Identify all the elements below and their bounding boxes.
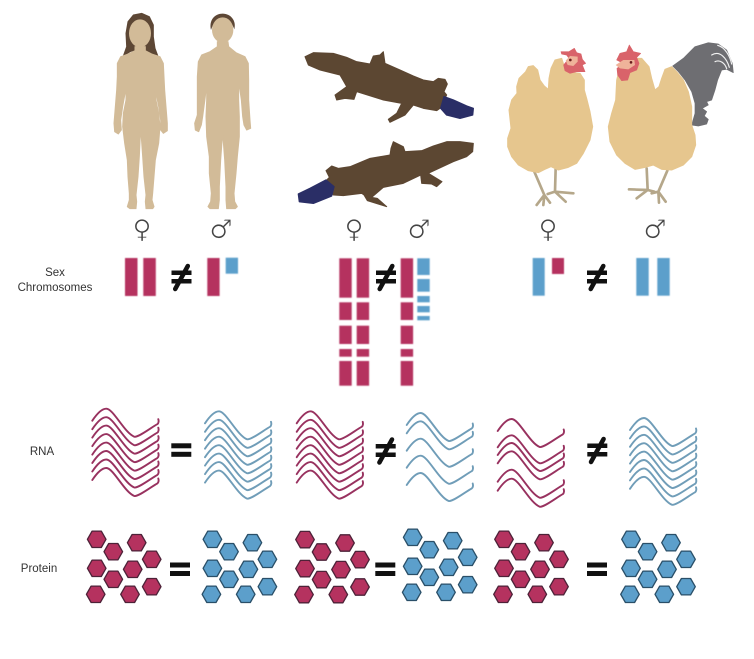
icon: male human <box>195 14 251 209</box>
symbol: male, platypus: ♂ <box>407 215 431 245</box>
RNA: chicken male <box>630 418 696 505</box>
chromosomes: platypus <box>339 258 430 386</box>
symbol: female, platypus: ♀ <box>344 215 364 245</box>
icon: rooster <box>608 43 733 203</box>
RNA: human male <box>205 411 271 499</box>
RNA: platypus female <box>297 411 363 499</box>
symbol: not equal, chicken chromosomes <box>587 266 607 289</box>
label: protein: Protein <box>21 563 57 575</box>
icon: hen <box>508 48 593 205</box>
symbol: female, human: ♀ <box>132 215 152 245</box>
symbol: male, human: ♂ <box>209 215 233 245</box>
protein: human female <box>86 531 161 602</box>
symbol: female, chicken: ♀ <box>538 215 558 245</box>
symbol: male, chicken: ♂ <box>643 215 667 245</box>
chromosomes: chicken <box>533 258 670 296</box>
symbol: not equal, human chromosomes <box>172 266 192 289</box>
label: sex chromosomes: Chromosomes <box>18 282 93 294</box>
symbol: equals, human protein <box>170 562 190 576</box>
symbol: equals, platypus protein <box>375 562 395 576</box>
protein: human male <box>202 531 277 602</box>
gender symbols row <box>132 215 667 245</box>
symbol: not equal, platypus RNA <box>376 440 396 462</box>
panel: human figures <box>114 13 251 209</box>
label: RNA: RNA <box>30 446 54 458</box>
icon: female human <box>114 13 167 209</box>
protein: chicken male <box>621 531 695 602</box>
symbol: equals, human RNA <box>171 443 191 457</box>
protein: chicken female <box>494 531 568 602</box>
symbol: not equal, platypus chromosomes <box>376 266 396 289</box>
panel: platypus figures <box>298 52 473 207</box>
label: sex chromosomes: Sex <box>45 267 65 279</box>
protein: platypus male <box>402 529 477 600</box>
RNA: platypus male <box>407 413 473 501</box>
icon: female platypus <box>305 52 473 122</box>
icon: male platypus <box>298 142 473 207</box>
symbol: equals, chicken protein <box>587 562 607 576</box>
protein: platypus female <box>295 531 369 603</box>
RNA: chicken female <box>498 419 564 507</box>
RNA: human female <box>92 409 159 496</box>
chromosomes: human <box>125 258 238 296</box>
panel: chicken figures <box>508 43 733 205</box>
symbol: not equal, chicken RNA <box>587 439 607 462</box>
